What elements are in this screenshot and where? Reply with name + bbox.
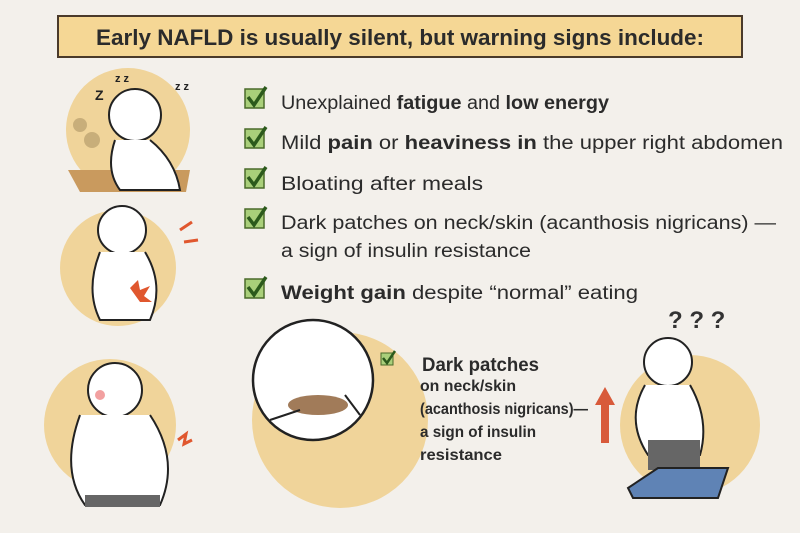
item 5: Weight gain despite “normal” eating xyxy=(281,283,638,304)
callout text: Dark patches xyxy=(422,355,539,376)
illustration: tired person xyxy=(66,68,190,192)
callout text: a sign of insulin xyxy=(420,424,536,441)
callout text xyxy=(381,351,588,464)
callout text: on neck/skin xyxy=(420,378,516,395)
illustration: weight gain on scale: ? ? ? xyxy=(668,307,725,334)
title banner: Early NAFLD is usually silent, but warning signs include: xyxy=(96,25,704,50)
item 3 xyxy=(245,167,483,195)
illustration: tired person: z z xyxy=(115,73,130,85)
item 5 xyxy=(245,277,638,304)
illustration: abdominal pain xyxy=(60,206,198,326)
item 2 xyxy=(245,127,783,154)
item 4 xyxy=(245,207,776,262)
checklist xyxy=(245,87,783,304)
item 4: Dark patches on neck/skin (acanthosis nigricans) — xyxy=(281,213,776,234)
title banner xyxy=(58,16,742,57)
item 1: Unexplained fatigue and low energy xyxy=(281,93,609,114)
item 4: a sign of insulin resistance xyxy=(281,241,531,262)
illustration: tired person: Z xyxy=(95,87,104,103)
callout text: (acanthosis nigricans)— xyxy=(420,401,588,418)
illustration: weight gain on scale xyxy=(595,307,760,498)
callout text: resistance xyxy=(420,447,502,464)
illustration: bloating xyxy=(44,359,192,507)
item 1 xyxy=(245,87,609,114)
item 2: Mild pain or heaviness in the upper right abdomen xyxy=(281,133,783,154)
illustration: tired person: z z xyxy=(175,81,190,93)
item 3: Bloating after meals xyxy=(281,174,483,195)
illustration: neck patches xyxy=(252,320,428,508)
